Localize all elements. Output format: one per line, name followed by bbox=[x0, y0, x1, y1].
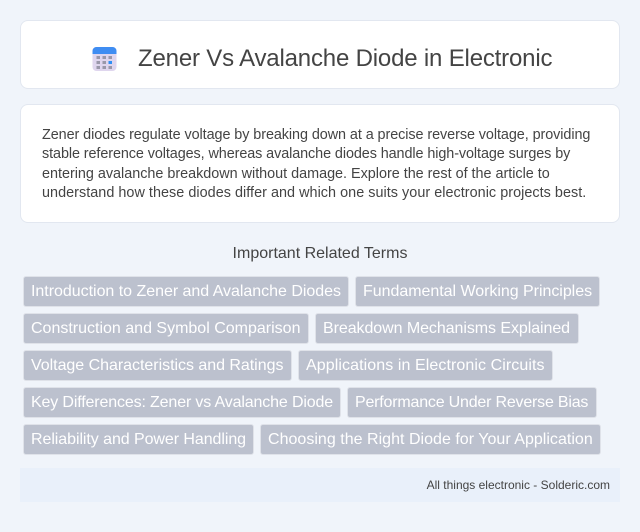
tag list bbox=[23, 276, 601, 455]
tag: Construction and Symbol Comparison bbox=[31, 320, 300, 337]
tag bbox=[23, 350, 292, 381]
tag: Performance Under Reverse Bias bbox=[355, 394, 588, 411]
tag bbox=[260, 424, 601, 455]
tag: Voltage Characteristics and Ratings bbox=[31, 357, 283, 374]
tag: Applications in Electronic Circuits bbox=[306, 357, 545, 374]
icon: calendar bbox=[92, 47, 116, 71]
footer credit: All things electronic - Solderic.com bbox=[427, 478, 610, 492]
tag bbox=[355, 276, 600, 307]
intro text panel bbox=[20, 104, 620, 223]
intro paragraph: stable reference voltages, whereas avalanche diodes handle high-voltage surges by bbox=[42, 146, 570, 162]
tag bbox=[315, 313, 579, 344]
intro paragraph: Zener diodes regulate voltage by breaking down at a precise reverse voltage, providing bbox=[42, 127, 590, 143]
header panel bbox=[20, 20, 620, 89]
tag bbox=[23, 387, 341, 418]
tag bbox=[347, 387, 597, 418]
tag bbox=[23, 313, 309, 344]
tag: Fundamental Working Principles bbox=[363, 283, 592, 300]
tag: Reliability and Power Handling bbox=[31, 431, 246, 448]
intro paragraph: understand how these diodes differ and which one suits your electronic projects best. bbox=[42, 185, 586, 201]
tag bbox=[298, 350, 553, 381]
footer bar bbox=[20, 468, 620, 502]
tag: Breakdown Mechanisms Explained bbox=[323, 320, 570, 337]
intro paragraph: entering avalanche breakdown without damage. Explore the rest of the article to bbox=[42, 166, 550, 182]
related terms heading: Important Related Terms bbox=[233, 245, 407, 262]
tag bbox=[23, 424, 254, 455]
intro paragraph bbox=[42, 127, 590, 201]
title: Zener Vs Avalanche Diode in Electronic bbox=[138, 45, 552, 72]
tag bbox=[23, 276, 349, 307]
tag: Key Differences: Zener vs Avalanche Diode bbox=[31, 394, 333, 411]
tag: Choosing the Right Diode for Your Application bbox=[268, 431, 593, 448]
tag: Introduction to Zener and Avalanche Diodes bbox=[31, 283, 341, 300]
